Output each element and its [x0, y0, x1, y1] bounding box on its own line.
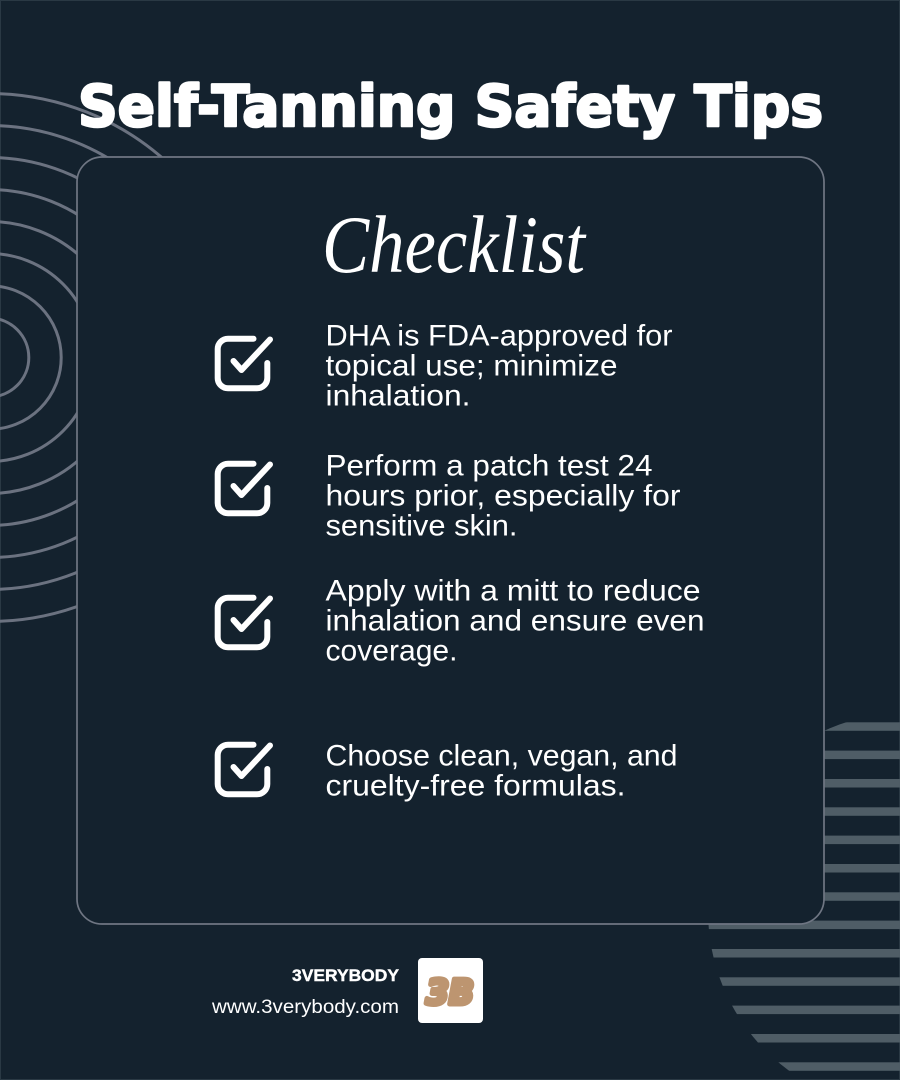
- text: item 3: Apply with a mitt to reduce: [326, 574, 700, 608]
- checklist item 4: [218, 740, 677, 802]
- icon: checkbox 4: [218, 745, 270, 794]
- footer website: www.3verybody.com: [211, 997, 399, 1018]
- text: item 2: [326, 450, 680, 542]
- text: item 1: topical use; minimize: [326, 350, 618, 382]
- checklist heading: Checklist: [322, 199, 587, 290]
- icon: checkbox 3: [218, 598, 270, 647]
- text: item 2: Perform a patch test 24: [326, 450, 652, 482]
- text: item 2: sensitive skin.: [326, 510, 518, 542]
- text: item 4: cruelty-free formulas.: [326, 770, 626, 802]
- text: item 1: [326, 320, 673, 412]
- checklist item 3: [218, 574, 704, 668]
- title: Self-Tanning Safety Tips: [78, 74, 823, 140]
- panel: checklist card: [77, 157, 824, 924]
- text: item 3: coverage.: [326, 634, 458, 668]
- checklist item 1: [218, 320, 673, 412]
- text: item 2: hours prior, especially for: [326, 480, 680, 512]
- text: item 3: inhalation and ensure even: [326, 604, 704, 638]
- footer brand name: 3VERYBODY: [292, 966, 400, 985]
- decorative striped circle: [700, 722, 900, 1071]
- icon: checkbox 2: [218, 464, 270, 513]
- text: item 4: Choose clean, vegan, and: [326, 740, 678, 772]
- checklist item 2: [218, 450, 680, 542]
- decorative concentric rings: [0, 94, 253, 622]
- icon: checkbox 1: [218, 339, 270, 388]
- icon: brand logo: [418, 958, 483, 1023]
- text: item 1: inhalation.: [326, 380, 470, 412]
- icon: brand logo: 3B: [426, 973, 474, 1013]
- text: item 3: [326, 574, 704, 668]
- text: item 4: [326, 740, 678, 802]
- text: item 1: DHA is FDA-approved for: [326, 320, 673, 352]
